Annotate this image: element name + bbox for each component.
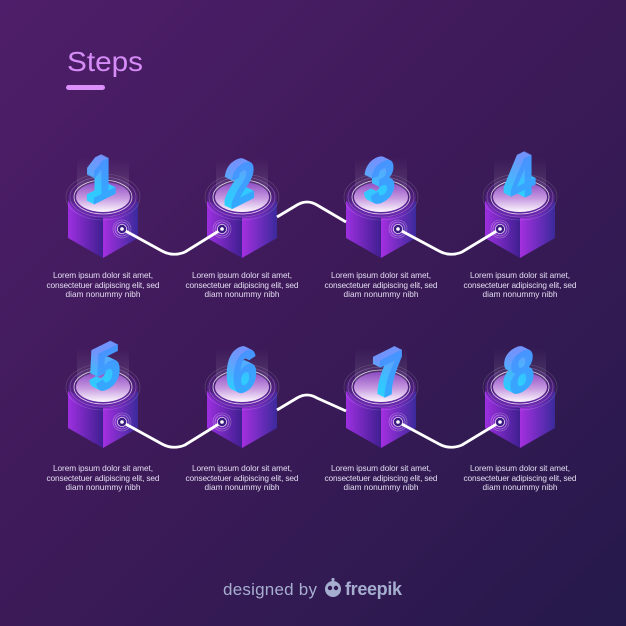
number 2: 2: [228, 146, 252, 220]
connector 1 to 2: [122, 229, 222, 254]
number 1: [85, 136, 116, 221]
number 4: 4: [505, 139, 530, 214]
step 8 block: [483, 348, 557, 448]
number 8: 8: [505, 333, 529, 407]
number 1: 1: [85, 140, 109, 214]
number 5: 5: [90, 329, 114, 404]
step 8 text: diam nonummy nibh: [482, 482, 558, 492]
connection nodes row 1: [113, 220, 509, 238]
number 2: 2: [231, 147, 255, 222]
number 1: 1: [86, 140, 110, 215]
number 7: 7: [373, 335, 397, 410]
number 8: 8: [506, 333, 530, 408]
number 4: 4: [511, 142, 536, 217]
step 3 text: [324, 270, 438, 299]
number 5: 5: [89, 329, 113, 403]
number 4: 4: [510, 142, 535, 216]
step 1 text: consectetuer adipiscing elit, sed: [46, 280, 160, 290]
number 3: 3: [371, 145, 395, 220]
step 5 text: diam nonummy nibh: [66, 482, 141, 492]
step 2 text: consectetuer adipiscing elit, sed: [186, 280, 299, 290]
number 3: 3: [367, 143, 391, 218]
number 4: 4: [504, 139, 529, 213]
number 7: 7: [375, 336, 399, 411]
number 2: 2: [230, 147, 254, 221]
number 2: 2: [224, 144, 248, 218]
footer credit: freepik: [345, 579, 403, 599]
step 1 block: [66, 158, 140, 258]
connector 2 to 3: [277, 202, 346, 222]
step 8 text: Lorem ipsum dolor sit amet,: [470, 463, 570, 473]
number 8: 8: [509, 335, 533, 409]
number 6: 6: [227, 332, 251, 407]
number 3: 3: [370, 145, 394, 219]
connector 7 to 8: [398, 422, 500, 447]
number 5: 5: [92, 330, 116, 405]
number 3: 3: [369, 144, 393, 219]
number 5: 5: [91, 330, 115, 404]
number 5: 5: [94, 331, 118, 406]
number 4: 4: [509, 141, 534, 216]
title underline: [66, 85, 105, 90]
number 3: 3: [365, 142, 389, 217]
step 5 text: [46, 463, 160, 492]
number 4: [504, 135, 536, 220]
number 6: 6: [226, 332, 250, 406]
step 8 text: consectetuer adipiscing elit, sed: [464, 473, 577, 483]
number 3: 3: [364, 142, 388, 216]
step 6 block: [205, 348, 279, 448]
step 1 text: [46, 270, 160, 299]
title: Steps: [67, 46, 143, 77]
number 1: 1: [92, 143, 116, 218]
number 7: 7: [378, 338, 402, 412]
connection nodes row 2: [113, 413, 509, 431]
number 2: 2: [226, 145, 250, 219]
step 4 text: consectetuer adipiscing elit, sed: [464, 280, 577, 290]
number 7: 7: [372, 335, 396, 409]
number 3: 3: [366, 143, 390, 217]
number 4: 4: [506, 140, 531, 214]
step 2 text: Lorem ipsum dolor sit amet,: [192, 270, 292, 280]
number 6: 6: [228, 333, 252, 407]
number 2: 2: [225, 144, 249, 219]
step 6 text: consectetuer adipiscing elit, sed: [186, 473, 299, 483]
number 8: 8: [508, 334, 532, 409]
number 5: 5: [95, 332, 119, 406]
step 5 text: Lorem ipsum dolor sit amet,: [53, 463, 153, 473]
number 4: 4: [508, 141, 533, 215]
number 8: 8: [503, 332, 527, 406]
number 7: 7: [376, 337, 400, 411]
step 1 text: diam nonummy nibh: [66, 289, 141, 299]
number 7: 7: [379, 338, 403, 413]
step 7 block: [344, 348, 418, 448]
connector 3 to 4: [398, 229, 500, 254]
step 6 text: [186, 463, 299, 492]
footer credit: [223, 578, 403, 599]
number 6: 6: [233, 335, 257, 410]
number 7: [372, 331, 403, 416]
number 6: [226, 328, 257, 413]
number 8: 8: [510, 335, 534, 410]
step 5 block: [66, 348, 140, 448]
number 8: 8: [504, 332, 528, 407]
number 1: 1: [90, 142, 114, 217]
number 1: 1: [89, 142, 113, 216]
step 7 text: consectetuer adipiscing elit, sed: [324, 473, 438, 483]
number 6: 6: [232, 335, 256, 409]
number 4: 4: [507, 140, 532, 215]
number 3: [364, 138, 395, 223]
step 2 block: [205, 158, 279, 258]
number 3: 3: [368, 144, 392, 218]
number 8: 8: [507, 334, 531, 408]
number 6: 6: [229, 333, 253, 408]
step 3 text: Lorem ipsum dolor sit amet,: [331, 270, 431, 280]
step 4 text: [464, 270, 577, 299]
step 3 text: diam nonummy nibh: [344, 289, 419, 299]
step 5 text: consectetuer adipiscing elit, sed: [46, 473, 160, 483]
number 1: 1: [91, 143, 115, 217]
step 4 text: diam nonummy nibh: [482, 289, 558, 299]
number 1: 1: [87, 141, 111, 215]
step 7 text: [324, 463, 438, 492]
step 4 text: Lorem ipsum dolor sit amet,: [470, 270, 570, 280]
number 7: 7: [374, 336, 398, 410]
number 2: 2: [229, 146, 253, 221]
number 5: 5: [96, 332, 120, 407]
number 2: [224, 140, 255, 225]
step 2 text: diam nonummy nibh: [204, 289, 280, 299]
connector 6 to 7: [277, 395, 346, 411]
step 8 text: [464, 463, 577, 492]
footer credit: designed by: [223, 580, 318, 599]
number 2: 2: [227, 145, 251, 220]
number 7: 7: [377, 337, 401, 412]
step 1 text: Lorem ipsum dolor sit amet,: [53, 270, 153, 280]
number 6: 6: [230, 334, 254, 408]
number 8: [503, 328, 534, 413]
icon: freepik mascot: [325, 578, 341, 597]
number 6: 6: [231, 334, 255, 409]
step 2 text: [186, 270, 299, 299]
step 7 text: Lorem ipsum dolor sit amet,: [331, 463, 431, 473]
connector 5 to 6: [122, 422, 222, 447]
number 5: 5: [93, 331, 117, 405]
number 1: 1: [88, 141, 112, 216]
step 4 block: [483, 158, 557, 258]
step 3 block: [344, 158, 418, 258]
step 3 text: consectetuer adipiscing elit, sed: [324, 280, 438, 290]
step 6 text: diam nonummy nibh: [204, 482, 280, 492]
number 5: [89, 325, 120, 410]
step 7 text: diam nonummy nibh: [344, 482, 419, 492]
step 6 text: Lorem ipsum dolor sit amet,: [192, 463, 292, 473]
